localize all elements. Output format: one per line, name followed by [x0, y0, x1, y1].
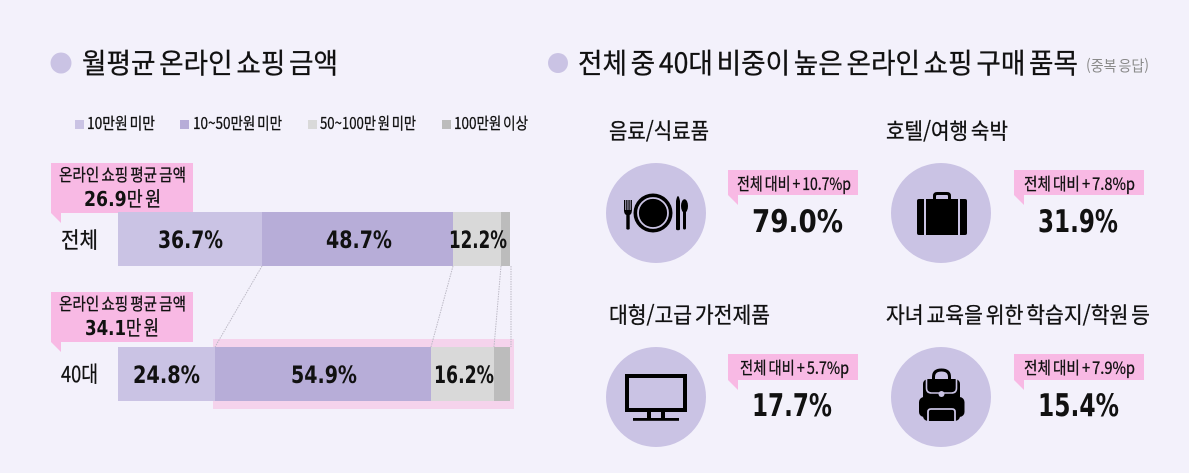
value: 17.7% — [752, 388, 832, 424]
connector lines between bars — [215, 266, 511, 347]
stacked bar: overall: 36.7% — [158, 226, 223, 254]
stacked bar: overall: 12.2% — [449, 226, 507, 254]
callout: 40s average — [51, 290, 193, 352]
panel: items with high share of 40s buyers — [548, 42, 1150, 447]
badge: 전체 대비 + 7.9%p — [1024, 354, 1135, 379]
value: 79.0% — [752, 204, 843, 240]
stacked bar: 40s: 54.9% — [291, 361, 357, 389]
heading: monthly average amount: 월평균 온라인 쇼핑 금액 — [82, 42, 338, 82]
icon: backpack — [919, 370, 964, 421]
value: 31.9% — [1038, 204, 1118, 240]
item: food and beverages — [606, 114, 858, 263]
legend: 50~100만 원 미만 — [320, 110, 416, 134]
value: 15.4% — [1038, 388, 1119, 424]
stacked bar: 40s — [118, 347, 510, 401]
item: large and premium appliances: 대형/고급 가전제품 — [609, 298, 770, 330]
stacked bar: overall: 48.7% — [326, 226, 392, 254]
heading: purchased items: (중복 응답) — [1086, 55, 1149, 76]
item: children's education: 자녀 교육을 위한 학습지/학원 등 — [886, 298, 1150, 330]
panel: monthly average online shopping amount — [50, 42, 528, 409]
callout: 40s average: 34.1만 원 — [85, 312, 159, 341]
callout: overall average: 온라인 쇼핑 평균 금액 — [59, 161, 186, 186]
item: food and beverages: 음료/식료품 — [609, 114, 709, 146]
badge: 전체 대비 + 7.8%p — [1024, 170, 1135, 195]
highlight band for 40s — [213, 339, 514, 409]
stacked bar: overall — [118, 212, 510, 266]
callout: 40s average: 온라인 쇼핑 평균 금액 — [59, 290, 186, 315]
badge: 전체 대비 + 10.7%p — [737, 170, 851, 195]
legend: 10만원 미만 — [87, 110, 155, 134]
icon: television — [627, 376, 685, 421]
legend: 10~50만원 미만 — [193, 110, 282, 134]
badge — [728, 170, 858, 205]
badge — [1014, 354, 1144, 390]
row label: 40s: 40대 — [61, 357, 98, 389]
badge — [1014, 170, 1144, 205]
item: children's education — [886, 298, 1150, 447]
badge — [728, 354, 858, 390]
legend: 100만원 이상 — [454, 110, 528, 134]
icon: suitcase — [917, 194, 967, 235]
badge: 전체 대비 + 5.7%p — [740, 354, 849, 379]
icon: plate and cutlery — [624, 194, 688, 232]
callout: overall average: 26.9만 원 — [84, 183, 161, 212]
legend — [75, 110, 528, 134]
callout: overall average — [51, 161, 193, 223]
heading: purchased items: 전체 중 40대 비중이 높은 온라인 쇼핑 구매 품목 — [578, 42, 1078, 82]
item: large and premium appliances — [606, 298, 858, 447]
stacked bar: 40s: 24.8% — [133, 361, 200, 389]
stacked bar: 40s: 16.2% — [434, 361, 494, 389]
item: hotels and travel: 호텔/여행 숙박 — [886, 114, 1008, 146]
row label: overall: 전체 — [61, 223, 98, 255]
item: hotels and travel — [886, 114, 1144, 263]
